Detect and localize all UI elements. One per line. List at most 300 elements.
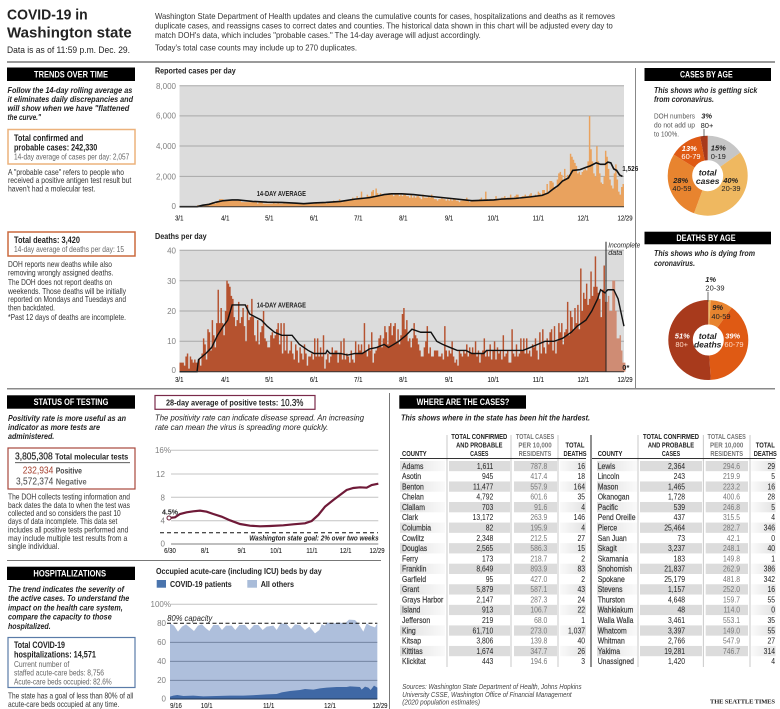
positivity x axis: 12/29 (370, 547, 385, 555)
table headers: right: TOTAL CONFIRMED (643, 432, 699, 441)
table column: right deaths: 29 (767, 461, 775, 471)
deaths x axis: 11/1 (533, 376, 544, 384)
table column: right counties: Whitman (598, 636, 625, 646)
note: deaths reporting: removing wrongly assigned deaths. (8, 268, 113, 278)
positivity y axis (155, 446, 171, 548)
table headers: right (598, 432, 777, 458)
donut labels: deaths: 80+ (675, 340, 689, 349)
table column: right counties: Mason (598, 482, 618, 492)
table column: left deaths: 43 (577, 585, 585, 594)
callout: 28-day average: 10.3% (281, 398, 303, 409)
legend: All others (261, 579, 294, 589)
heading: where are the cases: WHERE ARE THE CASES? (417, 397, 509, 407)
incomplete data marker (605, 242, 607, 372)
deaths x axis: 8/1 (399, 376, 408, 384)
cases y axis (156, 82, 177, 211)
deaths by age intro: coronavirus. (654, 258, 695, 268)
table column: right deaths: 1 (771, 554, 775, 563)
deaths by age intro: This shows who is dying from (654, 248, 755, 258)
cases x axis: 5/1 (265, 215, 274, 223)
table column: right cases per 10,000: 746.7 (723, 646, 740, 656)
callout: molecular tests: Positive (56, 466, 82, 476)
table column: left total cases: 1,674 (476, 646, 493, 656)
table intro: This shows where in the state has been hit the hardest. (401, 412, 590, 422)
donut labels: cases: 13% (682, 144, 697, 153)
table column: left cases per 10,000: 68.0 (534, 615, 547, 625)
trends intro: the curve." (8, 112, 42, 122)
table column: left counties: Island (402, 605, 420, 615)
panel: deaths by age (644, 232, 771, 368)
testing intro: indicator as more tests are (8, 422, 100, 432)
note: probable case: haven't had a molecular test. (8, 184, 95, 194)
beds y axis (151, 600, 171, 704)
donut labels: deaths: 39% (725, 332, 741, 340)
note: probable case (8, 167, 132, 194)
table column: left total cases: 2,348 (476, 533, 493, 543)
table column: right counties: Pierce (598, 523, 617, 533)
donut labels: cases: 40% (722, 176, 739, 185)
table headers: right: AND PROBABLE (648, 440, 694, 450)
deaths x axis: 10/1 (487, 376, 499, 384)
donut labels: deaths (675, 275, 744, 349)
table column: right cases per 10,000: 547.9 (723, 636, 740, 646)
table column: left cases per 10,000 (530, 461, 547, 666)
testing intro (8, 413, 126, 441)
callout: molecular tests: 3,572,374 (16, 476, 54, 488)
table column: right counties: Unassigned (598, 657, 634, 666)
table column: left total cases: 11,477 (473, 482, 493, 492)
cases x axis: 4/1 (221, 215, 230, 223)
title: COVID-19 in (7, 6, 88, 24)
panel: cases by age (644, 68, 771, 203)
donut labels: deaths: 20-39 (705, 284, 725, 292)
table column: right cases per 10,000: 114.0 (724, 605, 740, 615)
note: state goal: The state has a goal of less than 80% of all (8, 690, 133, 700)
deaths y axis: 10 (167, 337, 177, 346)
table column: left deaths: 35 (577, 492, 585, 502)
positivity line (169, 484, 378, 526)
table column: left cases per 10,000: 287.3 (530, 595, 547, 605)
80% capacity line (167, 622, 377, 624)
note: testing data: includes all positive tests performed and (8, 524, 129, 534)
table column: left counties: Garfield (402, 574, 426, 584)
deaths chart heading: Deaths per day (155, 231, 207, 241)
deaths x axis: 3/1 (175, 376, 184, 384)
table column: right total cases: 2,766 (668, 636, 685, 646)
table column: right cases per 10,000: 42.1 (727, 533, 740, 543)
table column: left cases per 10,000: 195.9 (530, 523, 547, 533)
deaths x axis: 12/29 (618, 376, 633, 384)
table column: right deaths: 386 (764, 564, 775, 574)
note: probable case: received a positive antigen test result but (8, 175, 132, 185)
positivity x axis: 12/1 (340, 547, 352, 555)
heading: where are the cases (399, 395, 526, 409)
donut labels: cases: 15% (711, 144, 726, 152)
table column: right deaths: 4 (771, 657, 775, 666)
positivity y axis: 0 (161, 540, 166, 548)
cases x axis: 12/1 (577, 215, 589, 223)
deaths bars (180, 256, 606, 372)
note: testing data: back dates the data to when the test was (8, 500, 130, 510)
deaths x axis: 4/1 (221, 376, 230, 384)
heading: cases by age: CASES BY AGE (680, 70, 733, 80)
beds y axis: 80 (157, 619, 167, 628)
table headers: right: CASES (662, 449, 680, 458)
table stripes (400, 461, 776, 666)
table column: left deaths: 146 (574, 513, 585, 522)
positivity intro: The positivity rate can indicate disease spread. An increasing (155, 412, 364, 422)
callout: molecular tests (8, 448, 135, 489)
cases x axis: 8/1 (399, 215, 408, 223)
table column: left cases per 10,000: 427.0 (530, 574, 547, 584)
donut: cases by age (680, 148, 735, 203)
table column: right counties: Thurston (598, 595, 625, 605)
table column: left counties (402, 461, 444, 666)
table column: right counties: Whatcom (598, 626, 627, 635)
cases by age intro (654, 85, 758, 104)
deaths y axis: 30 (167, 277, 177, 286)
hospitalizations intro: impact on the health care system, (8, 602, 123, 612)
table column: left total cases: 2,565 (476, 543, 493, 553)
table column: right total cases: 19,281 (664, 646, 685, 656)
table column: right cases per 10,000: 294.6 (723, 461, 740, 471)
intro text: duplicate cases, and reassigns cases to correct dates and counties. The historical data shown in this chart will be adjusted every day to (155, 20, 613, 30)
table column: left counties: Ferry (402, 554, 418, 563)
table column: right deaths: 55 (767, 595, 775, 605)
cases y axis: 8,000 (156, 82, 177, 91)
hospitalizations intro: hospitalized. (8, 621, 51, 631)
beds y axis: 60 (157, 638, 167, 647)
cases bars (180, 116, 624, 207)
table column: right counties: Spokane (598, 574, 625, 584)
table column: left deaths: 16 (577, 461, 585, 471)
table column: left cases per 10,000: 194.6 (530, 657, 547, 666)
positivity y axis: 12 (156, 470, 166, 479)
table column: left cases per 10,000: 601.6 (530, 492, 547, 502)
table column: right deaths: 28 (767, 492, 775, 502)
donut labels: cases: 40-59 (672, 184, 692, 193)
table column: left counties: Clallam (402, 502, 425, 512)
donut labels: deaths: 60-79 (724, 340, 744, 349)
callout: total hospitalizations: Total COVID-19 (14, 640, 65, 650)
title (7, 6, 132, 42)
table column: right total cases: 3,397 (668, 626, 685, 635)
deaths x axis (175, 376, 633, 384)
table column: left counties: Grays Harbor (402, 595, 444, 605)
positivity y axis: 4 (161, 517, 166, 526)
table column: right counties: Lewis (598, 461, 616, 471)
cases y axis: 4,000 (156, 142, 177, 151)
intro text: match DOH's data, which includes "probable cases." The 14-day average will adjust accordingly. (155, 30, 481, 40)
table column: right deaths: 0 (771, 533, 775, 543)
table column: left deaths: 4 (581, 523, 585, 533)
table column: left total cases: 1,611 (477, 461, 493, 471)
table headers: right: PER 10,000 (710, 440, 743, 450)
table column: left deaths: 1,037 (568, 626, 585, 635)
callout: total cases (8, 130, 135, 164)
donut labels: cases: 60-79 (681, 152, 701, 161)
all others area (170, 620, 377, 699)
table column: left counties: Douglas (402, 543, 427, 553)
callout: total deaths: 14-day average of deaths per day: 15 (14, 244, 124, 254)
donut labels: cases: 0-19 (711, 152, 726, 161)
table column: right deaths: 40 (767, 543, 775, 553)
table column: left deaths: 1 (581, 615, 585, 625)
table column: right counties (598, 461, 636, 666)
note: deaths reporting: *Past 12 days of deaths are incomplete. (8, 312, 126, 322)
table column: left total cases: 2,147 (476, 595, 493, 605)
covid patients area (170, 686, 377, 699)
cases y axis: 0 (172, 202, 177, 211)
beds y axis: 100% (151, 600, 171, 609)
table column: right total cases (664, 461, 685, 666)
table column: left total cases: 5,879 (476, 585, 493, 594)
note: does not add up: do not add up (654, 121, 695, 130)
chart: reported cases per day (155, 66, 638, 223)
table column: right cases per 10,000: 246.8 (723, 502, 740, 512)
callout: total hospitalizations: Current number of (14, 659, 70, 669)
positivity y axis: 8 (161, 493, 166, 502)
table column: left counties: Grant (402, 585, 420, 594)
table column: right counties: Pend Oreille (598, 513, 636, 522)
table column: left total cases: 219 (482, 615, 493, 625)
table column: right total cases: 3,461 (668, 615, 685, 625)
beds y axis: 20 (157, 676, 167, 685)
deaths x axis: 9/1 (445, 376, 453, 384)
hospitalizations intro: the active cases. To understand the (8, 593, 130, 603)
table column: right counties: Stevens (598, 585, 623, 594)
table column: right total cases: 48 (677, 605, 685, 615)
callout: total cases: probable cases: 242,330 (14, 142, 97, 152)
table column: left total cases (473, 461, 493, 666)
table column: right total cases: 1,157 (668, 585, 685, 594)
cases y axis: 6,000 (156, 112, 177, 121)
positivity x axis: 6/30 (164, 547, 176, 555)
table column: right cases per 10,000: 481.8 (723, 574, 740, 584)
label: latest cases: 1,526 (622, 164, 638, 173)
table headers: left: PER 10,000 (518, 440, 552, 450)
intro text: Washington State Department of Health updates and cleans the cumulative counts for cases, hospitalizations and deaths as it removes (155, 11, 615, 21)
table column: left cases per 10,000: 557.9 (530, 482, 547, 492)
cases x axis: 10/1 (487, 215, 499, 223)
table headers: left: TOTAL CONFIRMED (451, 432, 508, 441)
label: incomplete data: Incomplete (608, 240, 640, 250)
label: incomplete data: data (608, 248, 622, 257)
credit: the seattle times: THE SEATTLE TIMES (710, 698, 775, 706)
heading: status of testing: STATUS OF TESTING (34, 397, 108, 407)
table column: left cases per 10,000: 106.7 (530, 605, 547, 615)
table column: right cases per 10,000: 282.7 (723, 523, 740, 533)
table column: left counties: Kittitas (402, 646, 423, 656)
table column: left cases per 10,000: 263.9 (530, 513, 547, 522)
donut labels: cases (672, 112, 741, 193)
donut labels: deaths: 51% (675, 332, 690, 340)
table column: left counties: Klickitat (402, 657, 427, 666)
table column: left deaths: 18 (577, 472, 585, 481)
tick: 80+ (703, 129, 705, 137)
table column: right deaths: 0 (771, 605, 775, 615)
heading: trends over time: TRENDS OVER TIME (34, 70, 108, 80)
table column: right total cases: 243 (674, 472, 685, 481)
heading: hospitalizations: HOSPITALIZATIONS (33, 569, 106, 579)
table column: left deaths: 24 (577, 595, 585, 605)
testing intro: administered. (8, 431, 54, 441)
table column: left deaths: 2 (581, 574, 585, 584)
table column: left deaths: 15 (577, 543, 585, 553)
table column: right counties: San Juan (598, 533, 627, 543)
callout: 28-day average: 28-day average of positive tests: (166, 398, 278, 408)
table column: right total cases: 1,728 (668, 492, 685, 502)
table column: left deaths: 22 (577, 605, 585, 615)
deaths x axis: 6/1 (310, 376, 318, 384)
sources: Sources: Washington State Department of Health, Johns Hopkins (402, 682, 582, 691)
panel: hospitalizations (7, 567, 135, 709)
table column: right total cases: 4,648 (668, 595, 685, 605)
cases x axis: 6/1 (310, 215, 318, 223)
callout: total hospitalizations: Acute-care beds occupied: 82.6% (14, 676, 112, 686)
label: 80% capacity: 80% capacity (167, 613, 213, 623)
table column: left cases per 10,000: 787.8 (530, 461, 547, 471)
table column: left counties: Columbia (402, 523, 432, 533)
label: latest deaths: 0* (622, 363, 629, 372)
table column: right cases per 10,000: 248.1 (723, 543, 740, 553)
deaths x axis: 12/1 (577, 376, 589, 384)
table column: left deaths: 3 (581, 657, 585, 666)
table column: right cases per 10,000: 219.9 (723, 472, 740, 481)
cases x axis: 7/1 (354, 215, 363, 223)
panel: trends over time (7, 68, 135, 322)
table column: left cases per 10,000: 587.1 (530, 585, 547, 594)
table column: right counties: Skamania (598, 554, 629, 563)
donut labels: cases: total (699, 168, 717, 178)
table column: right deaths: 35 (767, 615, 775, 625)
table column: right cases per 10,000: 223.2 (723, 482, 740, 492)
donut labels: cases: 28% (672, 176, 689, 185)
beds x axis (170, 702, 388, 709)
table column: left total cases: 61,710 (473, 626, 493, 635)
cases by age intro: This shows who is getting sick (654, 85, 758, 95)
table headers: left: RESIDENTS (519, 449, 551, 458)
positivity x axis: 10/1 (270, 547, 282, 555)
positivity y axis: 16% (155, 446, 171, 455)
table column: right counties: Lincoln (598, 472, 619, 481)
goal line (160, 532, 378, 534)
table column: right counties: Wahkiakum (598, 605, 633, 615)
table column: left deaths: 83 (577, 564, 585, 574)
table column: left total cases: 703 (482, 502, 493, 512)
callout: total cases: Total confirmed and (14, 133, 83, 143)
sources (402, 682, 582, 706)
deaths y axis: 20 (167, 307, 177, 316)
intro text (155, 11, 615, 52)
table column: left counties: Clark (402, 513, 418, 522)
chart: deaths per day (155, 231, 640, 384)
data date: Data is as of 11:59 p.m. Dec. 29. (7, 45, 130, 56)
table headers: left: TOTAL CASES (516, 432, 554, 441)
table column: right total cases: 1,420 (668, 657, 685, 666)
trends intro: it eliminates daily discrepancies and (8, 94, 134, 104)
legend: COVID-19 patients (170, 579, 232, 589)
positivity intro (155, 412, 364, 432)
table column: left total cases: 913 (482, 605, 493, 615)
callout: total cases: 14-day average of cases per day: 2,057 (14, 152, 130, 162)
note: testing data: days of data incomplete. This data set (8, 516, 118, 526)
table headers: left: CASES (470, 449, 488, 458)
table headers: right: TOTAL (756, 440, 775, 450)
table column: right deaths: 5 (771, 472, 775, 481)
table headers: right: RESIDENTS (710, 449, 743, 458)
callout: molecular tests: Negative (56, 476, 87, 486)
title: Washington state (7, 24, 132, 42)
table column: right deaths: 5 (771, 502, 775, 512)
note: testing data: The DOH collects testing information and (8, 492, 130, 502)
table column: left counties: Cowlitz (402, 533, 424, 543)
donut labels: cases: 3% (701, 112, 712, 120)
table column: right total cases: 21,837 (664, 564, 685, 574)
note: state goal: acute-care beds occupied at any time. (8, 699, 119, 709)
panel: positivity rate (155, 396, 385, 555)
table column: right counties: Okanogan (598, 492, 629, 502)
table column: right deaths: 342 (764, 574, 775, 584)
donut: deaths by age (681, 312, 736, 368)
table column: left deaths: 40 (577, 636, 585, 646)
table column: left total cases: 443 (482, 657, 493, 666)
note: deaths reporting: DOH reports new deaths while also (8, 259, 112, 269)
callout: molecular tests: 232,934 (23, 466, 54, 476)
donut labels: deaths: 40-59 (711, 312, 731, 321)
cases x axis: 3/1 (175, 215, 184, 223)
label: incomplete data (608, 240, 640, 257)
deaths x axis: 7/1 (354, 376, 363, 384)
table column: right cases per 10,000: 252.0 (723, 585, 740, 594)
note: does not add up: to 100%. (654, 130, 679, 139)
sources: University CSSE, Washington Office of Financial Management (402, 690, 572, 699)
table headers: right: COUNTY (598, 449, 622, 458)
cases x axis: 11/1 (533, 215, 544, 223)
deaths y axis (167, 246, 177, 375)
table column: left counties: Franklin (402, 564, 426, 574)
positivity x axis: 9/1 (238, 547, 246, 555)
note: testing data: collected and so considers the past 10 (8, 508, 121, 518)
table column: right cases per 10,000: 553.1 (723, 615, 740, 625)
donut labels: cases: 20-39 (721, 184, 741, 193)
table column: right total cases: 2,364 (668, 461, 685, 471)
table column: right counties: Skagit (598, 543, 618, 553)
note: deaths reporting: weekends. Those deaths will be initially (7, 286, 127, 296)
beds y axis: 0 (162, 694, 167, 704)
label: 14-day average: 14-DAY AVERAGE (257, 189, 306, 198)
note: testing data: single individual. (8, 541, 59, 551)
positivity x axis (164, 547, 385, 555)
table column: right cases per 10,000: 159.7 (723, 595, 740, 605)
callout: 28-day average (155, 396, 315, 409)
donut labels: deaths: deaths (694, 339, 722, 349)
table column: right deaths: 4 (771, 513, 775, 522)
table column: left deaths: 2 (581, 554, 585, 563)
table column: left cases per 10,000: 273.0 (530, 626, 547, 635)
heading: status of testing (7, 395, 135, 409)
note: deaths reporting: The DOH does not report deaths on (8, 277, 112, 287)
table column: right total cases: 3,237 (668, 543, 685, 553)
heading: deaths by age: DEATHS BY AGE (676, 233, 736, 243)
table column: right counties: Yakima (598, 646, 621, 656)
table column: right total cases: 183 (674, 554, 685, 563)
table column: right total cases: 25,179 (664, 574, 685, 584)
callout: molecular tests: Total molecular tests (55, 452, 129, 462)
table column: left total cases: 8,649 (476, 564, 493, 574)
table column: right cases per 10,000: 400.6 (723, 492, 740, 502)
intro text: Today's total case counts may include up to 270 duplicates. (155, 42, 357, 52)
